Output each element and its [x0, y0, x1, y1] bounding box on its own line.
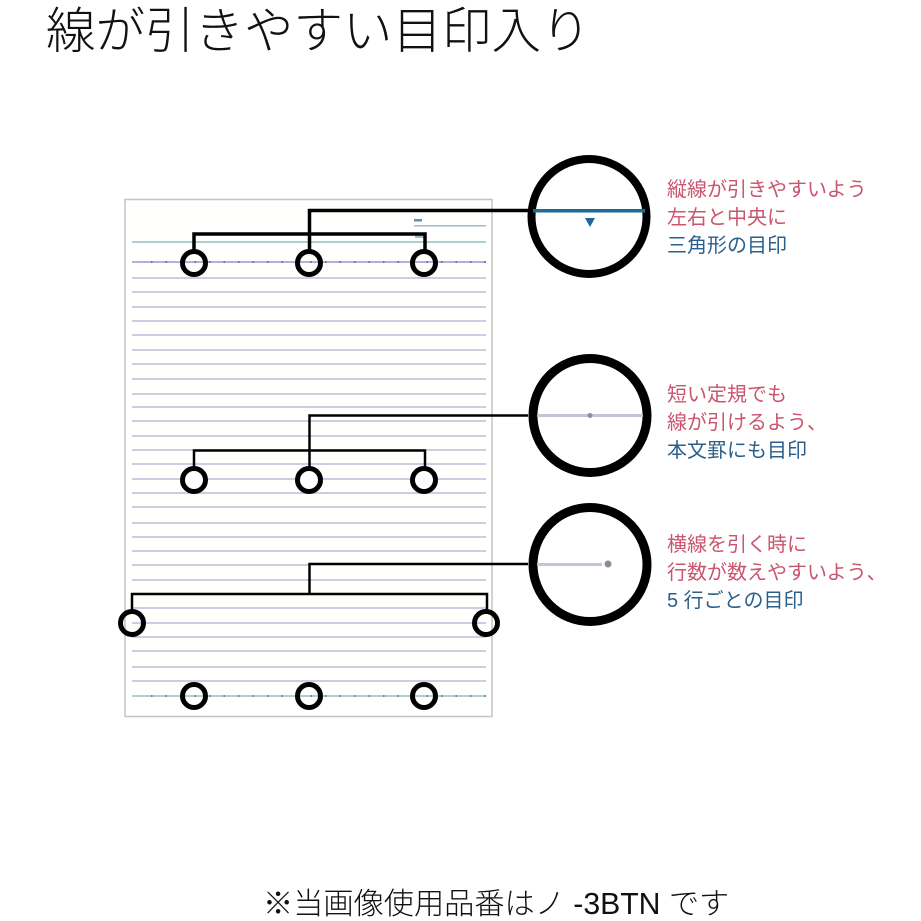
connector: five-line markers: [120, 564, 528, 634]
text block: five-line dot: 横線を引く時に: [667, 533, 807, 556]
tick marks: [151, 262, 486, 696]
magnifier: body dot: [533, 358, 647, 472]
text block: body dot: 線が引けるよう、: [667, 411, 827, 434]
text block: body dot: 短い定規でも: [667, 383, 787, 406]
connector: top markers: [182, 210, 528, 274]
ruled lines: [132, 242, 486, 696]
magnifier: five-line dot: [533, 508, 647, 622]
bottom markers: [182, 684, 436, 708]
header mark: [414, 219, 486, 238]
text block: body dot: 本文罫にも目印: [667, 439, 807, 462]
connector: body markers: [182, 416, 528, 492]
text block: five-line dot: 行数が数えやすいよう、: [667, 561, 887, 584]
text block: five-line dot: 5 行ごとの目印: [667, 589, 803, 612]
text block: five-line dot: [667, 533, 887, 612]
text block: triangle mark: 縦線が引きやすいよう: [667, 178, 867, 201]
text block: triangle mark: 左右と中央に: [667, 206, 787, 229]
text block: body dot: [667, 383, 827, 462]
magnifier: triangle mark: [532, 159, 646, 274]
text block: triangle mark: [667, 178, 867, 257]
panel: notebook page: [125, 200, 492, 716]
text block: triangle mark: 三角形の目印: [667, 234, 787, 257]
title: 線が引きやすい目印入り: [46, 4, 590, 59]
footnote: ※当画像使用品番はノ -3BTN です: [263, 887, 729, 921]
